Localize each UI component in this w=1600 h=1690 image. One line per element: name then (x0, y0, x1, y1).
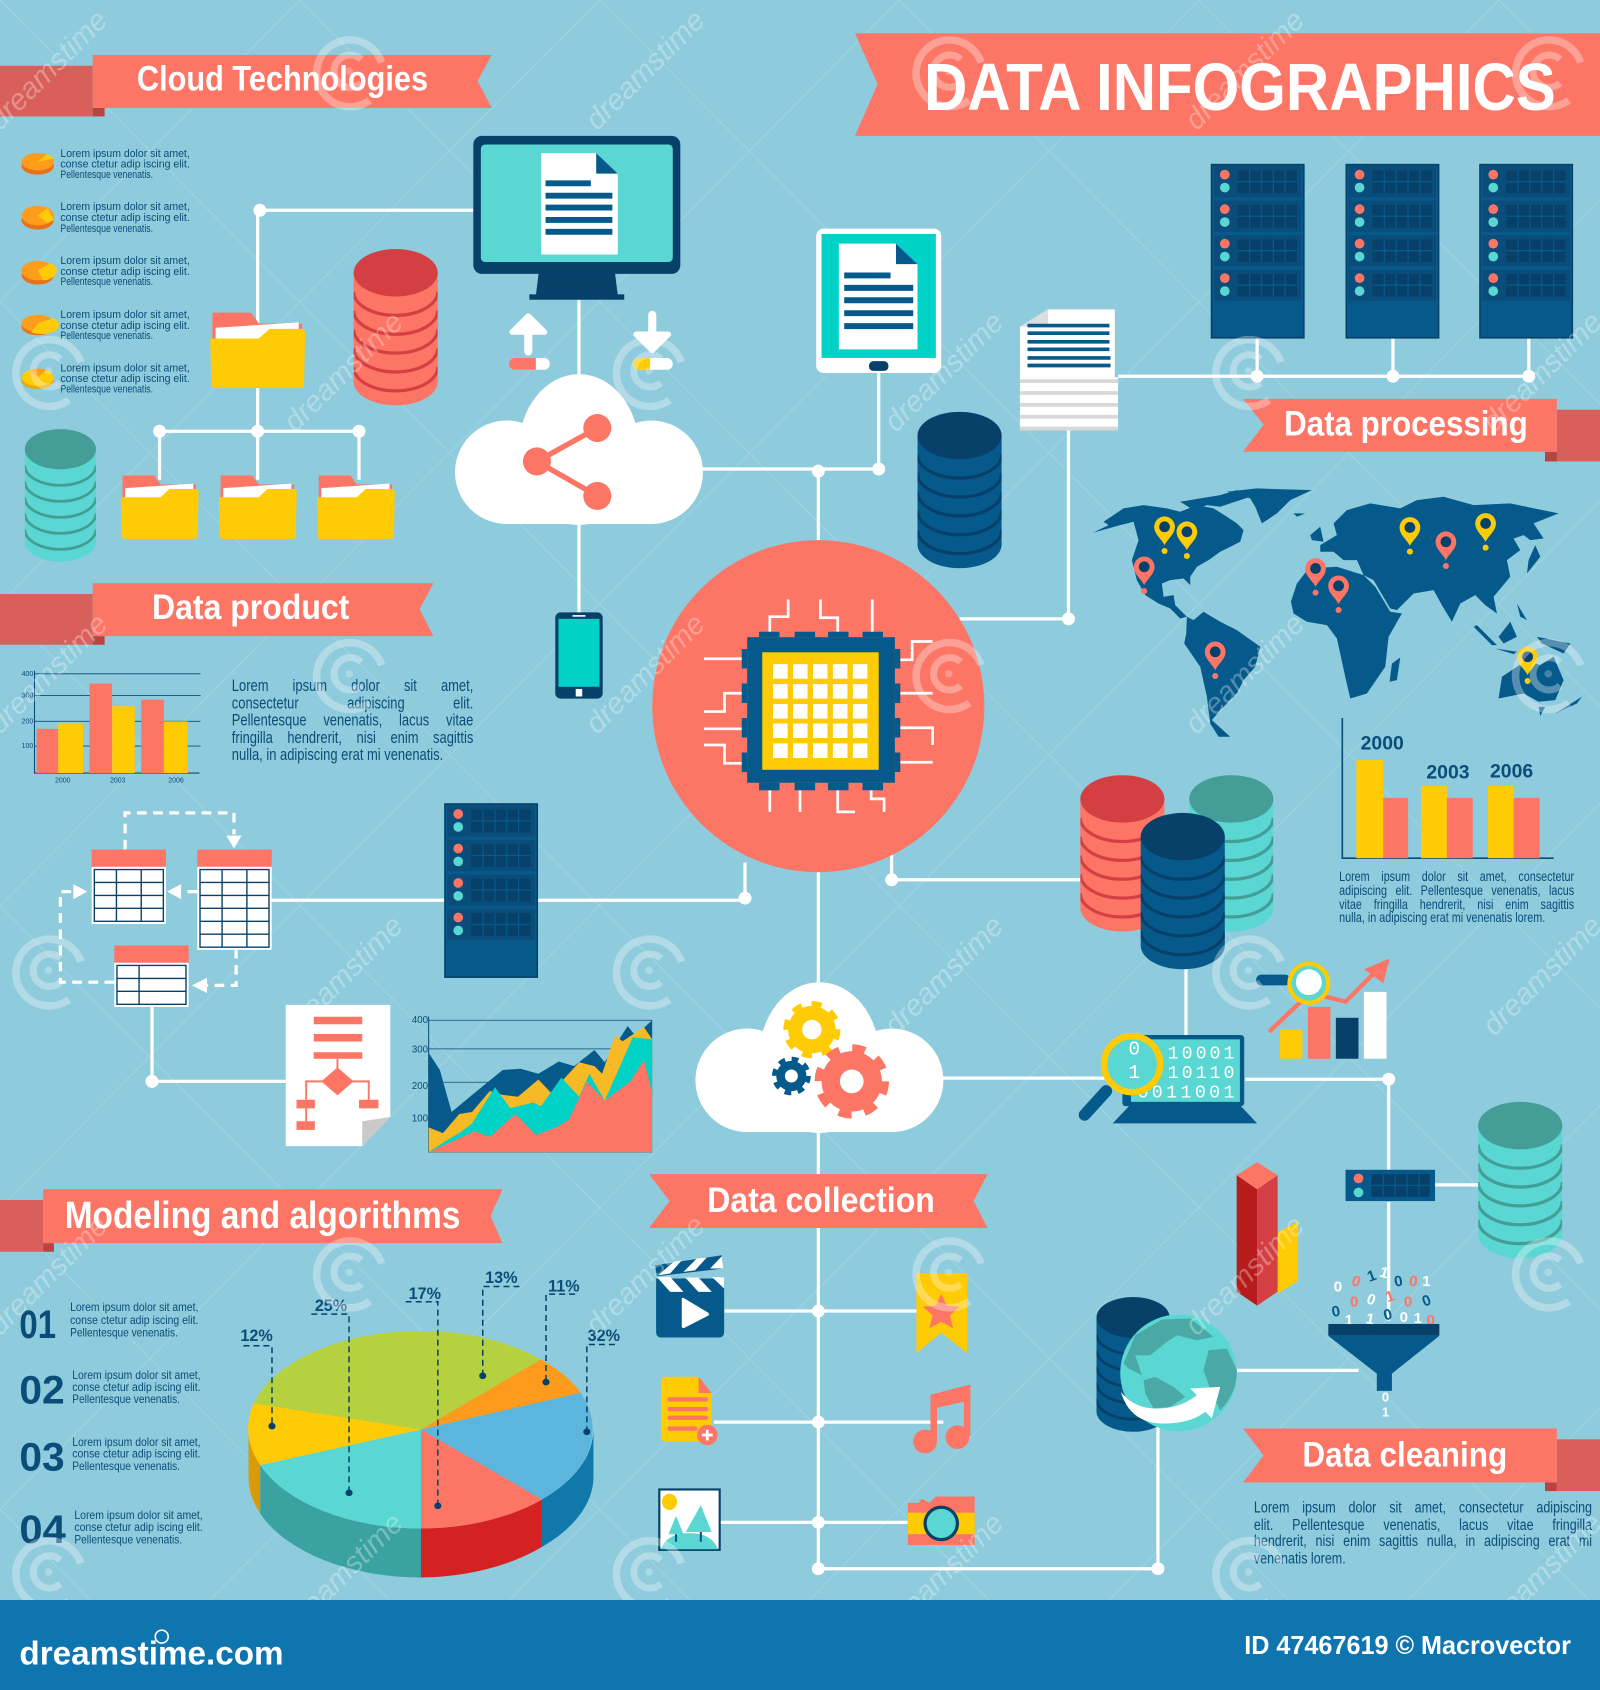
digits: 0 (1364, 1291, 1378, 1309)
icon: chart with magnifier (1261, 958, 1390, 1059)
3D pie chart (240, 1269, 620, 1577)
ribbon: Modeling and algorithms (0, 1189, 502, 1252)
digits: 1 (1378, 1264, 1390, 1282)
ribbon: Data processing: Data processing (1284, 404, 1528, 444)
pie labels (240, 1269, 620, 1345)
bar chart: data product: 2006 (168, 778, 184, 785)
legend row 5 (22, 362, 190, 395)
item 01: Lorem ipsum dolor sit amet, (70, 1300, 198, 1314)
watermark overlay: dreamstime (878, 909, 1010, 1042)
legend row 3: conse ctetur adip iscing elit. (60, 266, 190, 278)
item 02: Pellentesque venenatis. (72, 1392, 180, 1406)
icon: picture (659, 1489, 720, 1550)
section list: numbered items (19, 1300, 203, 1552)
bar chart: top right: 2000 (1361, 732, 1404, 754)
table 2 (197, 850, 272, 950)
pie labels: 25% (315, 1297, 347, 1315)
legend row 5: Lorem ipsum dolor sit amet, (60, 362, 190, 374)
title ribbon (855, 33, 1600, 136)
footer logo text: dreamstime.com (19, 1636, 284, 1673)
icon: download arrow (633, 315, 673, 370)
bar chart: data product: 200 (22, 718, 33, 725)
text block: data cleaning: hendrerit, nisi enim sagittis nulla, in adipiscing erat mi (1254, 1534, 1592, 1551)
database red (1080, 775, 1164, 932)
icon: laptop with binary: 10001 (1168, 1044, 1235, 1065)
legend row 2: Lorem ipsum dolor sit amet, (60, 201, 190, 213)
item 01: conse ctetur adip iscing elit. (70, 1313, 198, 1327)
area chart: 100 (412, 1113, 429, 1124)
database teal (1189, 775, 1273, 932)
arrow heads (73, 836, 242, 993)
footer bar (0, 1600, 1600, 1690)
bar chart: data product: 400 (22, 671, 33, 678)
text block: data product: Pellentesque venenatis, lacus vitae (232, 712, 473, 730)
bar chart: data product: 2000 (55, 778, 71, 785)
icon: note document (661, 1377, 718, 1445)
icon: cloud with gears (695, 982, 943, 1133)
item 02: Lorem ipsum dolor sit amet, (72, 1368, 201, 1382)
item 02: conse ctetur adip iscing elit. (72, 1380, 201, 1394)
legend row 2 (22, 201, 190, 235)
text block: data product: nulla, in adipiscing erat mi venenatis. (232, 746, 443, 764)
legend row 4: Pellentesque venenatis. (60, 330, 153, 342)
icon: funnel with binary digits: 0 (1382, 1390, 1389, 1405)
legend row 1: conse ctetur adip iscing elit. (60, 159, 190, 171)
pie labels: 17% (409, 1285, 441, 1303)
digits: 1 (1422, 1273, 1431, 1290)
bar chart: data product: 300 (22, 693, 33, 700)
legend row 4: conse ctetur adip iscing elit. (60, 320, 190, 332)
icon: database with globe (1096, 1297, 1237, 1432)
item 03 (19, 1435, 201, 1480)
text block: data product: consectetur adipiscing elit. (232, 694, 473, 713)
digits: 0 (1382, 1306, 1394, 1324)
icon: tablet with document (816, 229, 941, 373)
digits: 0 (1400, 1309, 1408, 1326)
text block: data product: fringilla hendrerit, nisi enim sagittis (232, 729, 473, 747)
legend list: cloud technologies (22, 148, 190, 395)
digits: 0 (1350, 1294, 1358, 1311)
digits: 0 (1393, 1273, 1404, 1291)
icon: database teal right (1478, 1102, 1562, 1258)
icon: folder small middle (219, 475, 297, 539)
icon: bookmark (916, 1273, 967, 1353)
icon: folder small left (121, 475, 199, 539)
watermark overlay: dreamstime (579, 1209, 712, 1342)
icon: upload arrow (509, 316, 550, 370)
icon: smartphone (555, 612, 603, 699)
ribbon: Data product (0, 583, 433, 645)
world map (1093, 488, 1582, 737)
gear coral (819, 1049, 884, 1114)
icon: camera (908, 1496, 975, 1545)
legend row 2: Pellentesque venenatis. (60, 223, 153, 235)
digits: 0 (1427, 1312, 1435, 1329)
pie labels: 13% (485, 1269, 518, 1287)
text block: top right chart: vitae fringilla hendrerit, nisi enim sagittis (1339, 897, 1574, 912)
digits: 1 (1365, 1310, 1376, 1329)
icon: folder large (210, 313, 305, 388)
legend row 1: Lorem ipsum dolor sit amet, (60, 148, 190, 160)
databases group (1080, 775, 1273, 969)
item 04 (19, 1508, 203, 1552)
icon: monitor with document (473, 136, 680, 300)
legend row 5: Pellentesque venenatis. (60, 383, 153, 395)
icon: 3D bars (1237, 1162, 1298, 1306)
icon: funnel with binary digits (1328, 1264, 1439, 1420)
icon: folder small right (317, 475, 395, 539)
icon: laptop with binary: 1 (1128, 1062, 1140, 1084)
legend row 5: conse ctetur adip iscing elit. (60, 373, 190, 385)
table 3 (114, 946, 189, 1007)
item 04: 04 (19, 1508, 66, 1552)
icon: server 3 (1480, 165, 1572, 338)
bar chart: top right: 2006 (1490, 760, 1533, 782)
legend row 3 (22, 255, 190, 288)
text block: data cleaning (1254, 1501, 1592, 1572)
watermark overlay: dreamstime (277, 909, 410, 1042)
icon: laptop with binary: 0 (1128, 1038, 1140, 1060)
watermark overlay: dreamstime (1178, 1209, 1311, 1342)
item 02: 02 (19, 1369, 65, 1413)
watermark overlay: dreamstime (878, 306, 1010, 438)
icon: laptop with binary: 10110 (1168, 1063, 1235, 1084)
digits: 1 (1383, 1287, 1397, 1306)
area chart (412, 1015, 652, 1152)
digits: 0 (1408, 1273, 1419, 1291)
watermark overlay: dreamstime (277, 306, 410, 438)
text block: top right chart: nulla, in adipiscing erat mi venenatis lorem. (1339, 910, 1545, 925)
watermark overlay: dreamstime (579, 607, 712, 740)
dashed arrows (60, 813, 236, 985)
bar chart: data product: 100 (22, 743, 33, 750)
watermark overlay: dreamstime (1178, 607, 1311, 740)
legend row 3: Pellentesque venenatis. (60, 276, 153, 288)
digits: 0 (1404, 1294, 1412, 1311)
bar chart: top right (1342, 718, 1554, 858)
legend row 4 (22, 309, 190, 342)
icon: laptop with binary (1085, 1035, 1257, 1123)
watermark overlay: dreamstime (1178, 4, 1311, 136)
item 01: Pellentesque venenatis. (70, 1325, 178, 1339)
icon: server centre left (445, 804, 537, 977)
ribbon: Data collection (649, 1174, 988, 1228)
map land masses (1093, 488, 1582, 737)
ribbon: Cloud Technologies (0, 55, 492, 116)
icon: server 1 (1212, 165, 1304, 338)
item 04: Pellentesque venenatis. (74, 1532, 182, 1546)
icon: database navy (918, 412, 1002, 568)
icon: music note (913, 1387, 970, 1453)
item 03: Pellentesque venenatis. (72, 1459, 180, 1473)
digits: 0 (1330, 1303, 1342, 1321)
icon: cloud with share (455, 374, 703, 525)
ribbon: Modeling and algorithms: Modeling and algorithms (65, 1194, 460, 1236)
item 01 (19, 1300, 198, 1347)
table 1 (92, 850, 166, 924)
bar chart: top right: 2003 (1426, 761, 1470, 783)
digits (1330, 1264, 1435, 1329)
ribbon: Data cleaning: Data cleaning (1302, 1434, 1507, 1474)
legend row 4: Lorem ipsum dolor sit amet, (60, 309, 190, 321)
text block: top right chart: adipiscing elit. Pellentesque venenatis, lacus (1339, 883, 1574, 898)
item 02 (19, 1368, 201, 1413)
text block: data product (232, 678, 473, 769)
legend row 1 (22, 148, 190, 181)
item 03: conse ctetur adip iscing elit. (72, 1447, 201, 1461)
watermark overlay: dreamstime (277, 1507, 410, 1639)
gear navy (775, 1060, 808, 1092)
icon: database red (354, 249, 438, 405)
watermark overlay: dreamstime (878, 1507, 1010, 1639)
pie labels: 12% (240, 1327, 273, 1345)
icon: small server unit (1346, 1170, 1435, 1201)
table flow diagram (60, 813, 272, 1007)
icon: flowchart document (286, 1005, 390, 1146)
connector nodes (146, 204, 1535, 1575)
ribbon: Data cleaning (1243, 1429, 1600, 1491)
gear yellow (787, 1005, 837, 1054)
digits: 0 (1349, 1272, 1363, 1291)
icon: server 2 (1346, 165, 1439, 338)
legend row 2: conse ctetur adip iscing elit. (60, 212, 190, 224)
legend row 1: Pellentesque venenatis. (60, 169, 153, 181)
digits: 0 (1334, 1279, 1342, 1296)
bar chart: data product (22, 671, 201, 785)
digits: 1 (1414, 1310, 1422, 1327)
icon: laptop with binary: 0011001 (1137, 1083, 1235, 1104)
pie labels: 32% (588, 1327, 620, 1345)
pie labels: 11% (548, 1278, 580, 1296)
text block: data cleaning: elit. Pellentesque venenatis, lacus vitae fringilla (1254, 1517, 1592, 1534)
area chart: 300 (412, 1044, 429, 1055)
icon: paper stack (1020, 309, 1118, 430)
watermark overlay: dreamstime (579, 4, 712, 136)
legend row 3: Lorem ipsum dolor sit amet, (60, 255, 190, 267)
digits: 0 (1420, 1292, 1434, 1311)
ribbon: Data processing (1243, 399, 1600, 461)
item 03: Lorem ipsum dolor sit amet, (72, 1435, 201, 1449)
text block: top right chart (1339, 870, 1574, 930)
icon: funnel with binary digits: 1 (1382, 1405, 1389, 1420)
item 04: Lorem ipsum dolor sit amet, (74, 1508, 203, 1522)
area chart: 200 (412, 1081, 429, 1092)
connector lines (152, 210, 1529, 1569)
area chart: 400 (412, 1015, 429, 1026)
footer credit: ID 47467619 © Macrovector (1244, 1632, 1571, 1660)
item 03: 03 (19, 1436, 65, 1480)
item 01: 01 (19, 1303, 56, 1347)
digits: 1 (1345, 1312, 1353, 1329)
ribbon: Data product: Data product (152, 587, 349, 627)
database navy (1141, 813, 1225, 969)
central processor chip (652, 540, 984, 872)
digits: 1 (1365, 1267, 1379, 1286)
icon: database teal left (25, 429, 96, 562)
icon: clapperboard (655, 1255, 724, 1338)
ribbon: Cloud Technologies: Cloud Technologies (137, 59, 428, 99)
text block: data cleaning: venenatis lorem. (1254, 1550, 1346, 1568)
ribbon: Data collection: Data collection (707, 1180, 935, 1220)
bar chart: data product: 2003 (110, 778, 126, 785)
item 04: conse ctetur adip iscing elit. (74, 1520, 203, 1534)
map pins (1134, 513, 1538, 684)
